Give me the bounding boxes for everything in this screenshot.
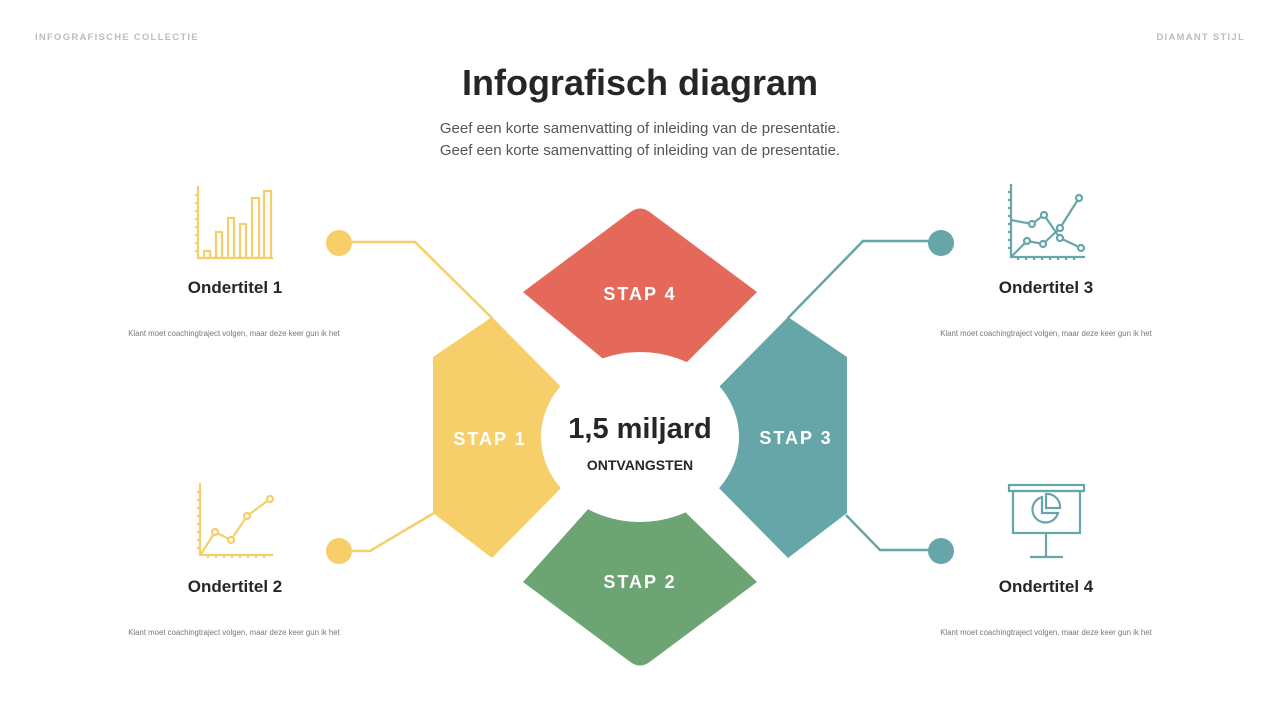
header left label: INFOGRAFISCHE COLLECTIE xyxy=(35,32,199,43)
heading: Ondertitel 4: Ondertitel 4 xyxy=(999,577,1094,596)
heading: Ondertitel 1: Ondertitel 1 xyxy=(188,278,282,297)
center: value xyxy=(541,352,739,522)
subtitle: Geef een korte samenvatting of inleiding van de presentatie. xyxy=(440,142,840,159)
subtitle: Geef een korte samenvatting of inleiding van de presentatie. xyxy=(440,120,840,137)
center: value: 1,5 miljard xyxy=(568,413,712,445)
shape: stap 4 (red) xyxy=(523,208,757,368)
connector: yellow top xyxy=(326,230,492,318)
icon: line chart (yellow) xyxy=(197,483,273,558)
center: value: ONTVANGSTEN xyxy=(587,457,693,473)
shape: stap 2 (green) xyxy=(523,507,757,666)
subtitle xyxy=(440,120,840,159)
text: body 3: Klant moet coachingtraject volgen, maar deze keer gun ik het xyxy=(940,329,1153,338)
text: body 4: Klant moet coachingtraject volgen, maar deze keer gun ik het xyxy=(940,628,1153,637)
shape: stap 3 (teal) xyxy=(713,317,847,558)
icon: multi line chart (teal) xyxy=(1008,184,1085,260)
connector: teal bottom xyxy=(846,515,954,564)
heading: Ondertitel 2: Ondertitel 2 xyxy=(188,577,282,596)
header right label: DIAMANT STIJL xyxy=(1156,32,1245,43)
icon: bar chart (yellow) xyxy=(195,186,273,258)
shape: stap 3 (teal): STAP 3 xyxy=(759,428,833,448)
connector: teal top xyxy=(788,230,954,318)
text: body 1: Klant moet coachingtraject volgen, maar deze keer gun ik het xyxy=(128,329,341,338)
shape: stap 1 (yellow): STAP 1 xyxy=(453,429,527,449)
shape: stap 4 (red): STAP 4 xyxy=(603,284,677,304)
icon: presentation board (teal) xyxy=(1009,485,1084,557)
text: body 2: Klant moet coachingtraject volgen, maar deze keer gun ik het xyxy=(128,628,341,637)
connector: yellow bottom xyxy=(326,513,434,564)
shape: stap 2 (green): STAP 2 xyxy=(603,572,677,592)
heading: Ondertitel 3: Ondertitel 3 xyxy=(999,278,1093,297)
shape: stap 1 (yellow) xyxy=(433,317,567,558)
title: Infografisch diagram xyxy=(462,62,818,103)
